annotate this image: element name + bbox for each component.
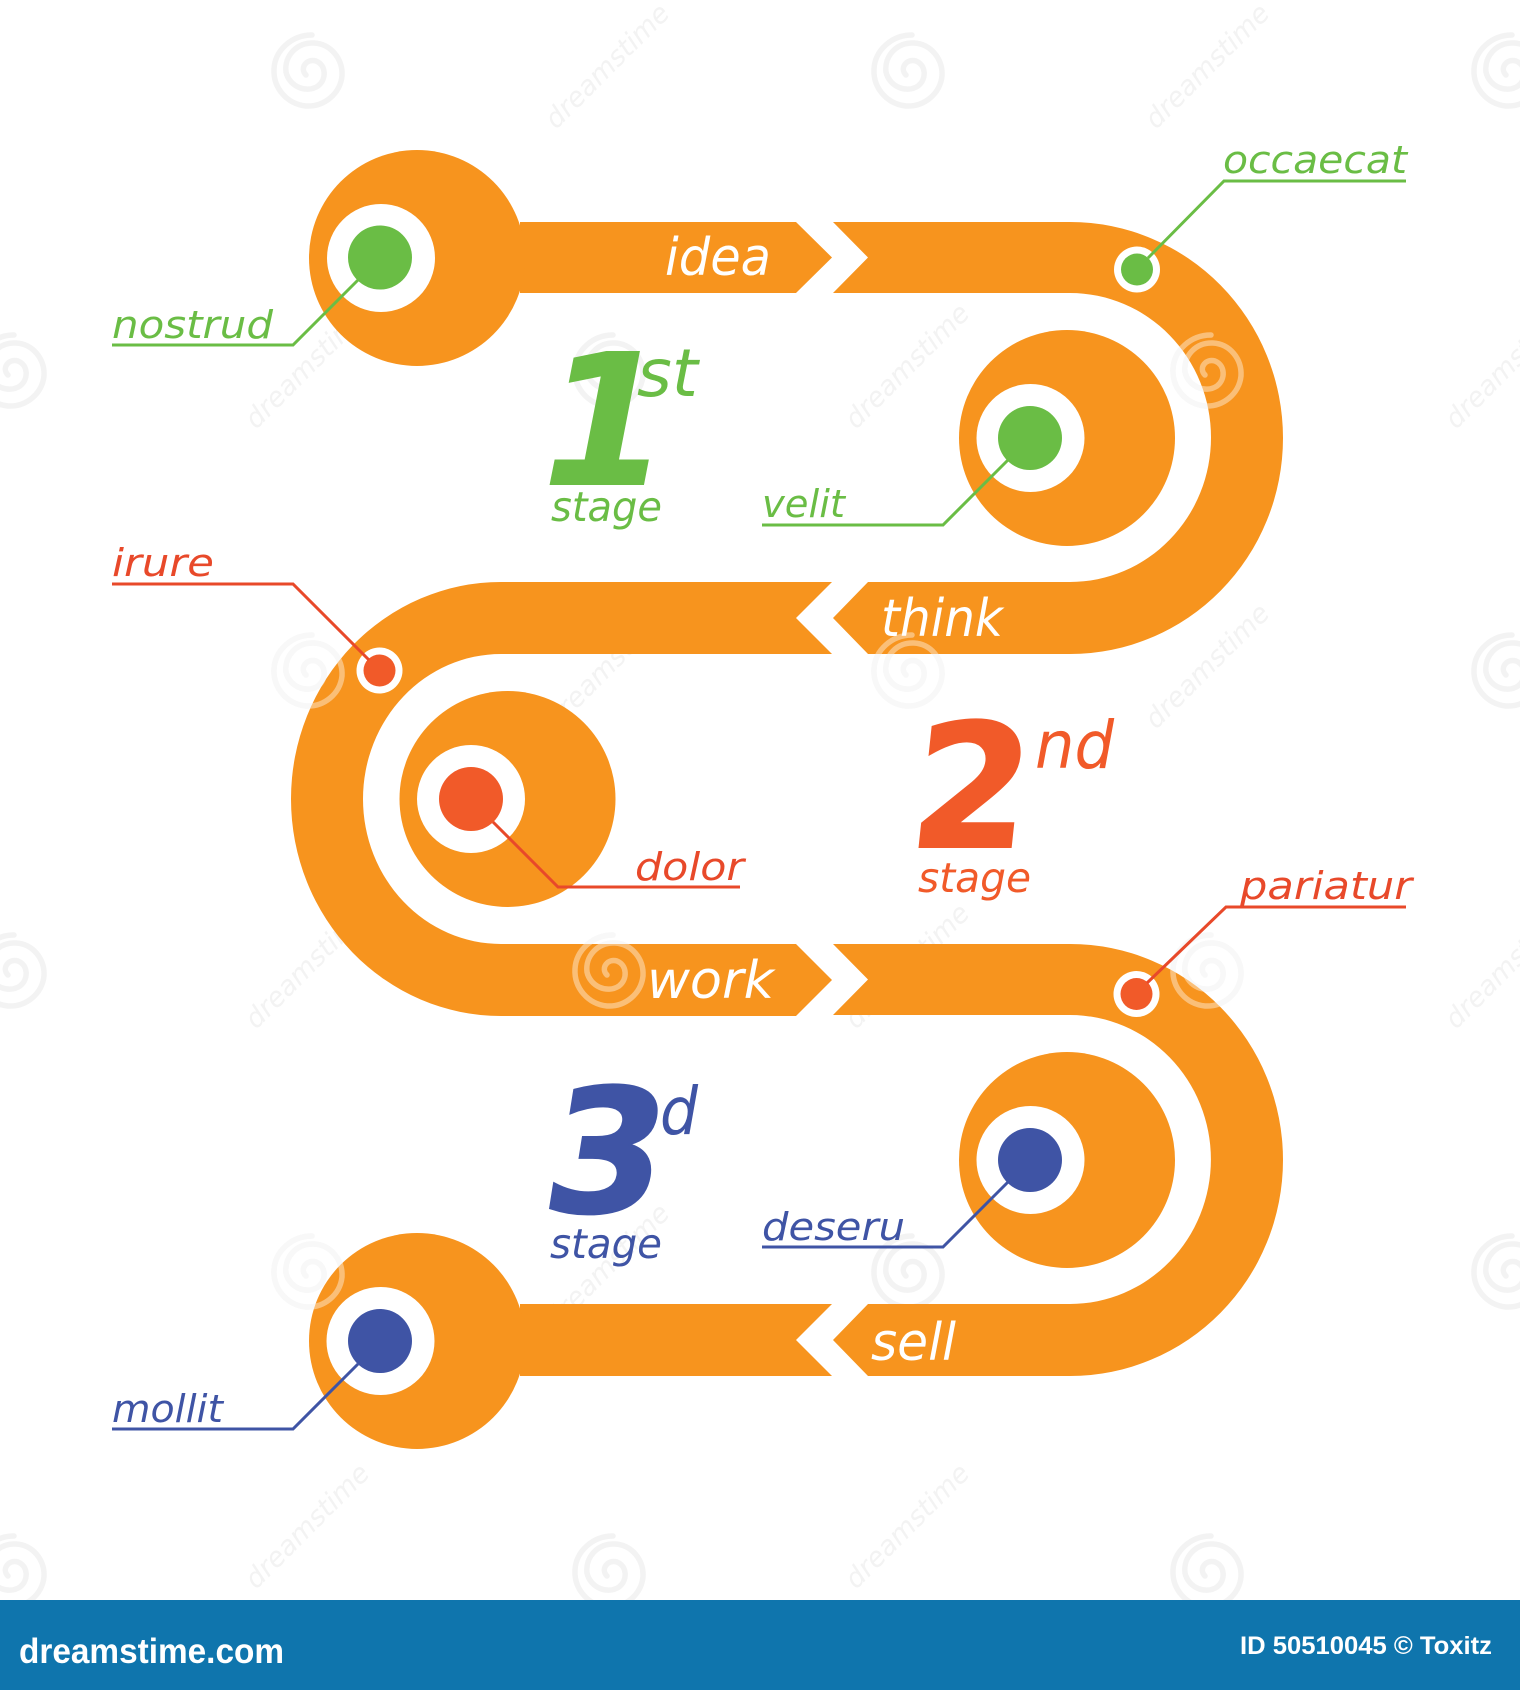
panel: winding orange road (291, 150, 1283, 1449)
watermark pattern on background: dreamstime (1139, 598, 1276, 735)
caption stage: stage (918, 854, 1031, 902)
callout: irure (112, 541, 402, 694)
start circle (309, 150, 525, 366)
segment: left bend (291, 582, 832, 1016)
watermark pattern on background: dreamstime (839, 1458, 976, 1595)
segment label: idea: idea (665, 228, 771, 288)
callout: deseru (762, 1106, 1084, 1249)
segment: start circle and idea arrow (520, 222, 832, 293)
segment labels (647, 228, 1005, 1373)
footer brand: dreamstime.com (19, 1632, 284, 1671)
inner circle: first bend (959, 330, 1175, 546)
callout: nostrud: nostrud (112, 303, 274, 347)
callout: velit (762, 384, 1084, 526)
segment: first right bend (833, 222, 1283, 654)
callout: pariatur: pariatur (1239, 864, 1415, 908)
footer image id: ID 50510045 © Toxitz (1240, 1632, 1492, 1660)
suffix nd: nd (1035, 707, 1115, 784)
watermark pattern on background: dreamstime (1139, 0, 1276, 135)
stage 3 heading (532, 1052, 699, 1268)
callout: occaecat: occaecat (1223, 138, 1409, 182)
segment: second right bend (833, 944, 1283, 1376)
watermark pattern on background: dreamstime (239, 1458, 376, 1595)
callout: mollit (112, 1287, 434, 1431)
callout: deseru: deseru (762, 1205, 905, 1249)
numeral 1: 1 (543, 316, 669, 527)
callout: velit: velit (762, 482, 847, 526)
callout: dolor (417, 745, 747, 889)
watermark pattern on background: dreamstime (539, 0, 676, 135)
suffix st: st (637, 335, 700, 412)
inner circle: left bend (400, 691, 616, 907)
caption stage: stage (551, 483, 662, 531)
segment: end arrow (520, 1304, 832, 1376)
suffix d: d (660, 1073, 699, 1150)
footer bar (0, 1600, 1520, 1690)
callout: mollit: mollit (112, 1387, 225, 1431)
segment label: think: think (881, 589, 1005, 649)
watermark pattern on background: dreamstime (539, 598, 676, 735)
watermark pattern on background: dreamstime (239, 898, 376, 1035)
callout: irure: irure (112, 541, 214, 585)
callout: pariatur (1114, 864, 1415, 1017)
inner circle: second bend (959, 1052, 1175, 1268)
stage 2 heading (902, 687, 1115, 902)
caption stage: stage (550, 1220, 662, 1268)
callout: dolor: dolor (635, 845, 747, 889)
end circle (309, 1233, 525, 1449)
numeral 2: 2 (902, 687, 1042, 888)
stage 1 heading (543, 316, 700, 531)
callout: occaecat (1114, 138, 1409, 292)
watermark pattern on background: dreamstime (839, 898, 976, 1035)
segment label: work: work (647, 951, 776, 1011)
numeral 3: 3 (532, 1052, 683, 1253)
segment label: sell: sell (871, 1313, 957, 1373)
watermark pattern on background: dreamstime (239, 298, 376, 435)
watermark pattern on background: dreamstime (839, 298, 976, 435)
callout: nostrud (112, 204, 435, 347)
watermark spirals over road (274, 335, 1241, 1307)
watermark pattern on background: dreamstime (1139, 1198, 1276, 1335)
watermark pattern on background: dreamstime (539, 1198, 676, 1335)
